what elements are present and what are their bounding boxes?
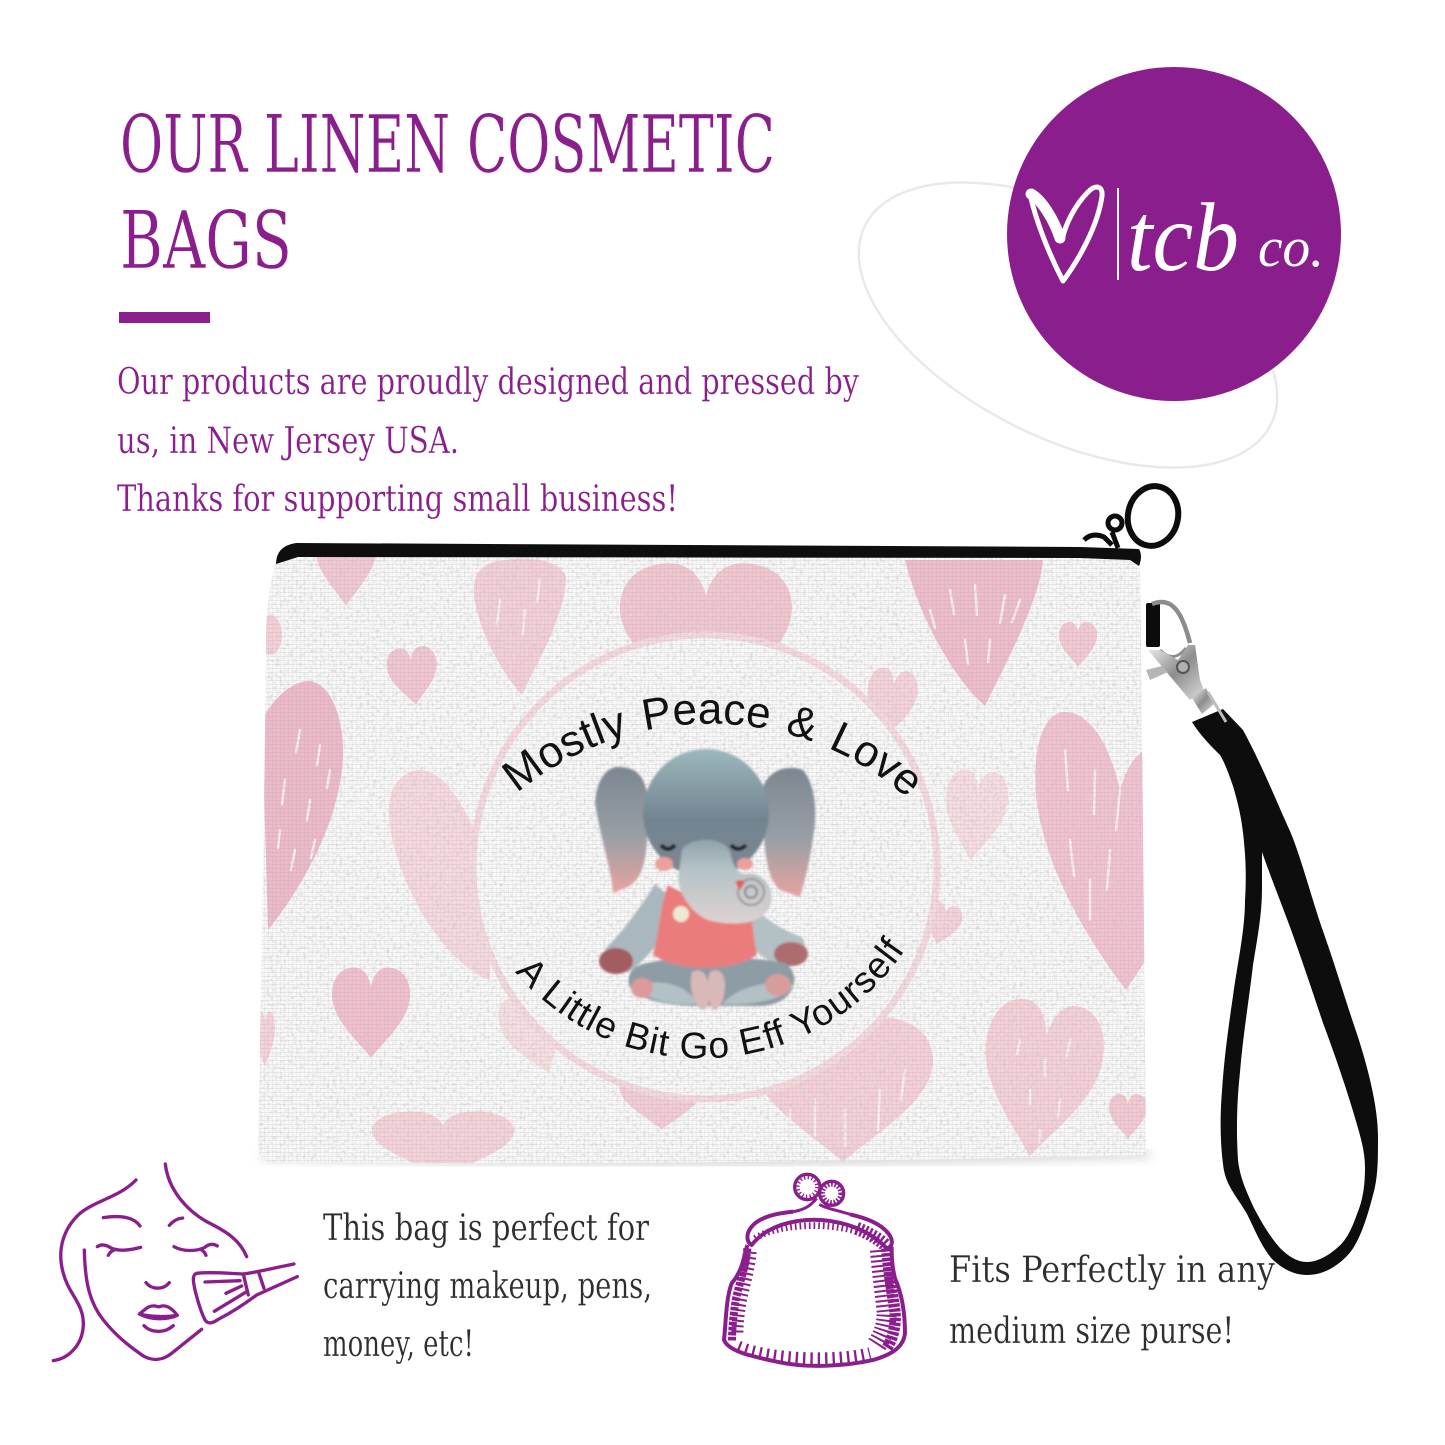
clasp body: [1148, 645, 1204, 700]
lobster clasp: [1146, 602, 1226, 722]
hands: [599, 948, 633, 974]
intro text: Thanks for supporting small business!: [117, 479, 678, 520]
bag curved slogan top: Mostly Peace & Love: [502, 698, 918, 794]
icon: face with makeup brush: [53, 1164, 297, 1361]
black tab: [1146, 603, 1160, 647]
clasp thumb lever: [1146, 666, 1168, 680]
feet: [691, 970, 725, 1010]
frame: [747, 1212, 892, 1248]
left arm: [605, 884, 680, 971]
decorative orbit ellipse behind logo: [815, 123, 1321, 527]
intro text: [117, 362, 860, 520]
icon: purse: [724, 1174, 905, 1366]
heart sketch marks: [278, 580, 1120, 1146]
legs: [629, 957, 794, 1006]
text: fits in purse: medium size purse!: [949, 1311, 1234, 1352]
intro text: Our products are proudly designed and pressed by: [117, 362, 860, 403]
right ear: [763, 768, 815, 897]
text: perfect for carrying: money, etc!: [323, 1324, 474, 1365]
zipper: [276, 543, 1141, 566]
clasp pivot: [1177, 661, 1189, 673]
text: perfect for carrying: [323, 1208, 652, 1365]
title: [120, 98, 775, 287]
left hatching: [732, 1248, 747, 1342]
outline: [724, 1245, 905, 1366]
frame hatching: [755, 1226, 880, 1242]
zipper ring and pull: [1084, 481, 1184, 551]
clasp balls: [795, 1174, 820, 1200]
icon: logo heart: [1030, 187, 1102, 281]
title: BAGS: [120, 194, 292, 287]
cosmetic bag: [258, 543, 1146, 1163]
logo divider: [1117, 188, 1119, 280]
pink top: [653, 885, 757, 968]
left ear: [595, 767, 648, 893]
cheeks: [655, 857, 673, 871]
right hatching: [887, 1248, 895, 1348]
bottom hatching: [738, 1347, 870, 1358]
text: fits in purse: Fits Perfectly in any: [949, 1250, 1276, 1291]
right arm: [735, 900, 805, 966]
clasp hook: [1152, 602, 1190, 643]
intro text: us, in New Jersey USA.: [117, 421, 459, 462]
title divider bar: [119, 312, 210, 323]
title: OUR LINEN COSMETIC: [120, 98, 775, 191]
strap: [1192, 709, 1378, 1275]
logo badge: tcb co.: [1007, 67, 1341, 401]
trunk: [678, 840, 772, 923]
head: [643, 749, 769, 877]
bag fabric: [258, 556, 1146, 1163]
logo wordmark tcb: tcb: [1127, 184, 1239, 292]
trunk curl: [738, 879, 764, 905]
mouth: [735, 880, 745, 890]
elephant illustration: [595, 749, 815, 1010]
clasp collar: [1192, 688, 1214, 714]
text: fits in purse: [949, 1250, 1276, 1352]
circle badge area: [473, 635, 937, 1099]
text: perfect for carrying: carrying makeup, pens,: [323, 1266, 652, 1307]
bag shadow: [262, 1150, 1150, 1166]
flower: [673, 906, 689, 922]
linen texture: [250, 550, 1150, 1170]
text: perfect for carrying: This bag is perfect for: [323, 1208, 650, 1249]
logo wordmark co.: co.: [1258, 217, 1324, 279]
heart pattern: [255, 522, 1147, 1176]
closed eyes: [661, 845, 746, 849]
bag curved slogan bottom: A Little Bit Go Eff Yourself: [514, 934, 903, 1059]
